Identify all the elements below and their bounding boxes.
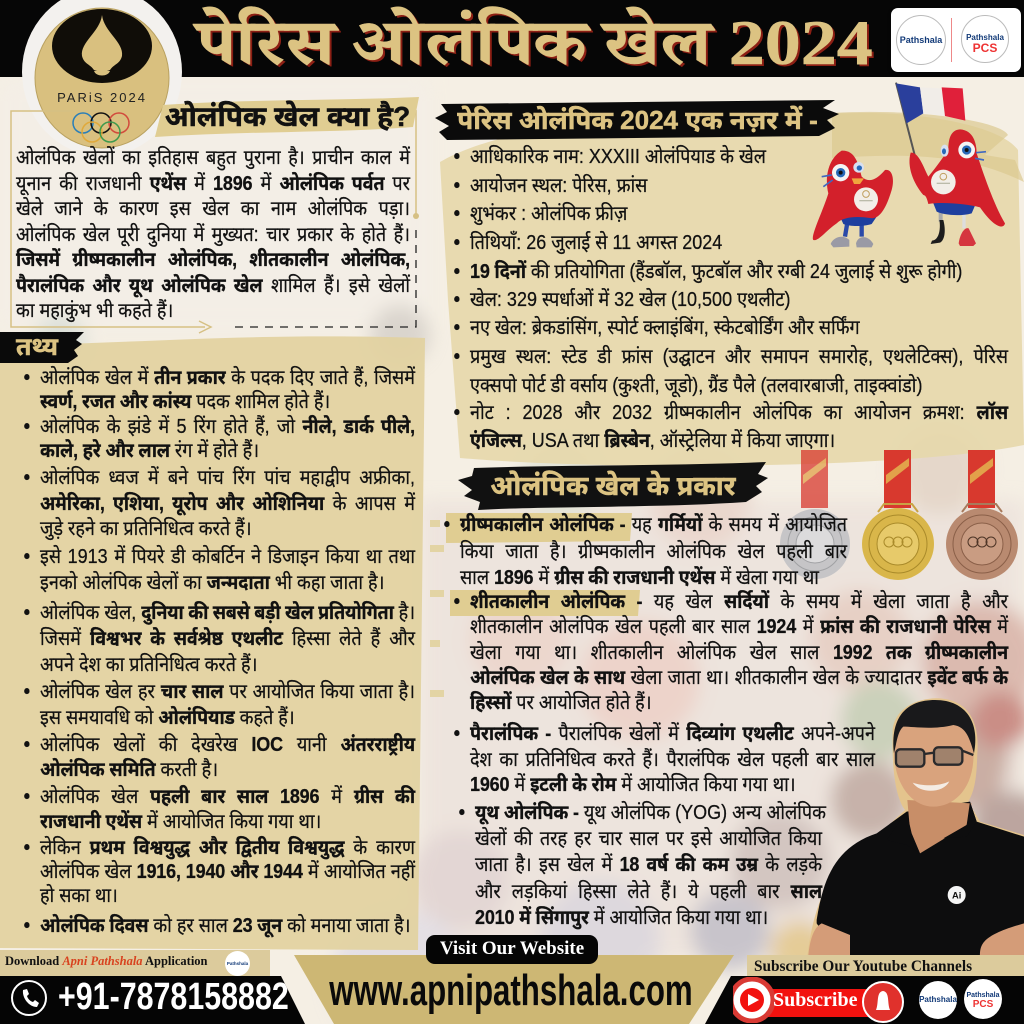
fact 1 [24, 366, 416, 413]
fact 4 [24, 544, 416, 594]
subscribe button [733, 977, 904, 1023]
facts list [24, 366, 416, 938]
bronze medal [946, 450, 1018, 580]
text: ओलंपिक खेल पूरी दुनिया में मुख्यत: चार प्रकार के होते हैं। [16, 224, 410, 246]
left mascot [813, 151, 893, 247]
text: • [24, 837, 30, 859]
icon: Pathshala PCS logo: PCS [973, 41, 997, 55]
fact 2 [24, 414, 415, 462]
icon: app logo [225, 951, 250, 976]
text: • [24, 467, 30, 489]
text: • [454, 289, 460, 311]
presenter photo [808, 698, 1024, 955]
Paralympics: 1960 में इटली के रोम में आयोजित किया गया था। [470, 774, 796, 796]
subscribe text: Subscribe [773, 989, 857, 1011]
text: खेले जाने के कारण इस खेल का नाम ओलंपिक पड़ा। [16, 198, 410, 220]
Youth Olympics: यूथ ओलंपिक - यूथ ओलंपिक (YOG) अन्य ओलंपिक [475, 802, 826, 824]
flag [896, 83, 965, 195]
fact 2: काले, हरे और लाल रंग में होते हैं। [40, 440, 259, 462]
main venues [454, 344, 1008, 398]
right mascot [909, 129, 1005, 246]
silver medal [780, 450, 850, 579]
icon: Pathshala PCS logo: Pathshala [966, 33, 1004, 42]
icon: phone [11, 980, 47, 1016]
heading brush [435, 100, 839, 140]
Youth Olympics: और लड़कियां हिस्सा लेते हैं। ये पहली बार साल [475, 881, 822, 903]
fact 9 [24, 836, 416, 907]
fact 2: ओलंपिक के झंडे में 5 रिंग होते हैं, जो नीले, डार्क पीले, [40, 416, 415, 438]
footer: subscribe heading strip [747, 955, 1024, 977]
Youth Olympics: खेलों की तरह हर चार साल पर इसे आयोजित किया [475, 828, 822, 850]
text: • [454, 232, 460, 254]
text: • [454, 402, 460, 424]
heading text: पेरिस ओलंपिक 2024 एक नज़र में - [457, 105, 818, 135]
Youth Olympics: जाता है। इस खेल में 18 वर्ष की कम उम्र के लड़के [475, 854, 822, 876]
text: • [454, 317, 460, 339]
text: • [454, 175, 460, 197]
presenter photo: Ai [952, 890, 961, 900]
text: का महाकुंभ भी कहते हैं। [16, 300, 173, 322]
fact 10: ओलंपिक दिवस को हर साल 23 जून को मनाया जाता है। [40, 915, 410, 937]
summer Olympics: किया जाता है। ग्रीष्मकालीन ओलंपिक खेल पहली बार [460, 540, 847, 562]
icon: PCS channel: PCS [973, 999, 993, 1010]
glance list [454, 144, 1009, 452]
text: • [24, 915, 30, 937]
text: यूनान की राजधानी एथेंस में 1896 में ओलंपिक पर्वत पर [16, 172, 410, 194]
summer Olympics: साल 1896 में ग्रीस की राजधानी एथेंस में खेला गया था [460, 567, 819, 589]
heading text: ओलंपिक खेल क्या है? [165, 101, 410, 132]
summer Olympics: ग्रीष्मकालीन ओलंपिक - यह गर्मियों के समय में आयोजित [460, 514, 847, 536]
main venues: एक्सपो पोर्ट डी वर्साय (कुश्ती, जूडो), ग्रैंड पैले (तलवारबाजी, ताइक्वांडो) [470, 375, 922, 397]
footer: subscribe block [705, 976, 1024, 1024]
gold medal [862, 450, 934, 580]
types list: • [454, 591, 460, 613]
text: • [24, 734, 30, 756]
winter Olympics: हिस्सों पर आयोजित होते हैं। [470, 692, 652, 714]
text: • [24, 602, 30, 624]
icon: Pathshala PCS logo [961, 15, 1009, 63]
subscribe heading: Subscribe Our Youtube Channels [754, 958, 972, 975]
fact 8: ओलंपिक खेल पहली बार साल 1896 में ग्रीस की [40, 786, 415, 808]
note: नोट : 2028 और 2032 ग्रीष्मकालीन ओलंपिक का आयोजन क्रमश: लॉस [470, 402, 1008, 424]
icon: Pathshala logo [896, 15, 946, 65]
Paralympics: पैरालंपिक - पैरालंपिक खेलों में दिव्यांग एथलीट अपने-अपने [470, 723, 875, 745]
divider [951, 18, 952, 62]
winter Olympics: शीतकालीन ओलंपिक खेल पहली बार साल 1924 में फ्रांस की राजधानी पेरिस में [470, 616, 1008, 638]
visit website pill [426, 935, 598, 964]
sports: खेल: 329 स्पर्धाओं में 32 खेल (10,500 एथलीट) [470, 289, 790, 311]
text: पैरालंपिक और यूथ ओलंपिक खेल शामिल हैं। इसे खेलों [16, 274, 410, 296]
heading: what are the Olympics [155, 97, 419, 137]
fact 5: जिसमें विश्वभर के सर्वश्रेष्ठ एथलीट हिस्सा लेते हैं और [40, 628, 415, 650]
fact 7 [24, 732, 416, 781]
icon: PCS channel: Pathshala [966, 992, 1000, 999]
fact 3: जुड़े रहने का प्रतिनिधित्व करते हैं। [40, 518, 252, 540]
text: • [24, 546, 30, 568]
note [454, 400, 1009, 452]
venue: आयोजन स्थल: पेरिस, फ्रांस [470, 175, 647, 197]
winter Olympics: शीतकालीन ओलंपिक - यह खेल सर्दियों के समय में खेला जाता है और [470, 591, 1008, 613]
fact 1: ओलंपिक खेल में तीन प्रकार के पदक दिए जाते हैं, जिसमें [40, 367, 415, 389]
fact 3 [24, 466, 416, 540]
visit website pill: Visit Our Website [440, 938, 584, 959]
fact 9: हो सका था। [40, 885, 118, 907]
duration: 19 दिनों की प्रतियोगिता (हैंडबॉल, फुटबॉल और रग्बी 24 जुलाई से शुरू होगी) [470, 261, 962, 283]
heading: facts [0, 332, 84, 363]
winter Olympics: ओलंपिक खेल के साथ खेला जाता था। शीतकालीन खेल के ज्यादातर इवेंट बर्फ के [470, 667, 1008, 689]
dates: तिथियाँ: 26 जुलाई से 11 अगस्त 2024 [470, 232, 722, 254]
types list: • [459, 802, 465, 824]
text: • [454, 261, 460, 283]
fact 5: अपने देश का प्रतिनिधित्व करते हैं। [40, 654, 257, 676]
main venues: प्रमुख स्थल: स्टेड डी फ्रांस (उद्घाटन और समापन समारोह, एथलेटिक्स), पेरिस [470, 346, 1008, 368]
text: • [24, 786, 30, 808]
text: • [454, 203, 460, 225]
heading text: ओलंपिक खेल के प्रकार [490, 471, 736, 501]
new sports: नए खेल: ब्रेकडांसिंग, स्पोर्ट क्लाइंबिंग, स्केटबोर्डिंग और सर्फिंग [470, 317, 860, 339]
fact 9: ओलंपिक खेल 1916, 1940 और 1944 में आयोजित नहीं [40, 861, 415, 883]
Youth Olympics [459, 800, 826, 930]
footer: download strip [0, 950, 270, 977]
fact 9: लेकिन प्रथम विश्वयुद्ध और द्वितीय विश्वयुद्ध के कारण [40, 837, 415, 859]
official name: आधिकारिक नाम: XXXIII ओलंपियाड के खेल [470, 146, 766, 168]
intro paragraph [16, 146, 410, 322]
text: जिसमें ग्रीष्मकालीन ओलंपिक, शीतकालीन ओलंपिक, [16, 249, 410, 271]
heading brush [155, 97, 419, 137]
icon: Pathshala channel: Pathshala [919, 995, 957, 1004]
heading text: तथ्य [16, 333, 58, 361]
fact 6: इस समयावधि को ओलंपियाड कहते हैं। [40, 707, 295, 729]
summer Olympics [444, 512, 848, 589]
footer: phone block [0, 976, 305, 1024]
fact 4: इसे 1913 में पियरे डी कोबर्टिन ने डिजाइन किया था तथा [40, 546, 415, 568]
icon: PCS channel [964, 979, 1002, 1019]
website url: www.apnipathshala.com [329, 966, 693, 1015]
types list: • [444, 514, 450, 536]
heading brush [0, 332, 84, 363]
text: • [454, 346, 460, 368]
header band [0, 0, 1024, 77]
note: एंजिल्स, USA तथा ब्रिस्बेन, ऑस्ट्रेलिया में किया जाएगा। [470, 430, 835, 452]
text: • [24, 681, 30, 703]
icon: Pathshala logo: Pathshala [900, 35, 942, 45]
fact 7: ओलंपिक समिति करती है। [40, 759, 218, 781]
fact 5 [24, 600, 416, 676]
fact 1: स्वर्ण, रजत और कांस्य पदक शामिल होते हैं। [40, 391, 330, 413]
title: पेरिस ओलंपिक खेल 2024 [197, 7, 873, 78]
medals [780, 450, 1018, 580]
heading: Paris Olympics at a glance [435, 100, 839, 140]
fact 8: राजधानी एथेंस में आयोजित किया गया था। [40, 811, 321, 833]
fact 8 [24, 784, 416, 833]
fact 7: ओलंपिक खेलों की देखरेख IOC यानी अंतरराष्ट्रीय [40, 734, 415, 756]
fact 5: ओलंपिक खेल, दुनिया की सबसे बड़ी खेल प्रतियोगिता है। [40, 602, 415, 624]
winter Olympics [454, 590, 1009, 714]
download text: Download Apni Pathshala Application [5, 954, 208, 968]
mascots and flag [812, 82, 1005, 248]
fact 6: ओलंपिक खेल हर चार साल पर आयोजित किया जाता है। [40, 681, 415, 703]
types list: • [454, 723, 460, 745]
fact 3: अमेरिका, एशिया, यूरोप और ओशिनिया के आपस में [40, 492, 415, 514]
icon: app logo: Pathshala [227, 961, 248, 966]
heading brush [458, 462, 768, 510]
fact 6 [24, 680, 415, 729]
Paris 2024 emblem [22, 0, 182, 148]
text: ओलंपिक खेलों का इतिहास बहुत पुराना है। प्राचीन काल में [16, 147, 410, 169]
Paralympics: देश का प्रतिनिधित्व करते हैं। पैरालंपिक खेल पहली बार साल [470, 748, 875, 770]
Paris 2024 emblem: PARiS 2024 [57, 90, 147, 105]
Paralympics [454, 722, 876, 796]
text: • [454, 146, 460, 168]
phone number: +91-7878158882 [58, 976, 289, 1018]
text: • [24, 367, 30, 389]
winter Olympics: खेला गया था। शीतकालीन ओलंपिक खेल साल 1992 तक ग्रीष्मकालीन [470, 642, 1008, 664]
fact 4: इनको ओलंपिक खेलों का जन्मदाता भी कहा जाता है। [40, 572, 384, 594]
heading: types of Olympic games [458, 462, 768, 510]
text: • [24, 416, 30, 438]
icon: Pathshala channel [919, 981, 957, 1019]
logo box [891, 8, 1021, 72]
fact 3: ओलंपिक ध्वज में बने पांच रिंग पांच महाद्वीप अफ्रीका, [40, 467, 415, 489]
footer: website trapezoid [294, 955, 734, 1024]
Youth Olympics: 2010 में सिंगापुर में आयोजित किया गया था। [475, 907, 768, 929]
mascot text: शुभंकर : ओलंपिक फ्रीज़ [470, 203, 627, 225]
